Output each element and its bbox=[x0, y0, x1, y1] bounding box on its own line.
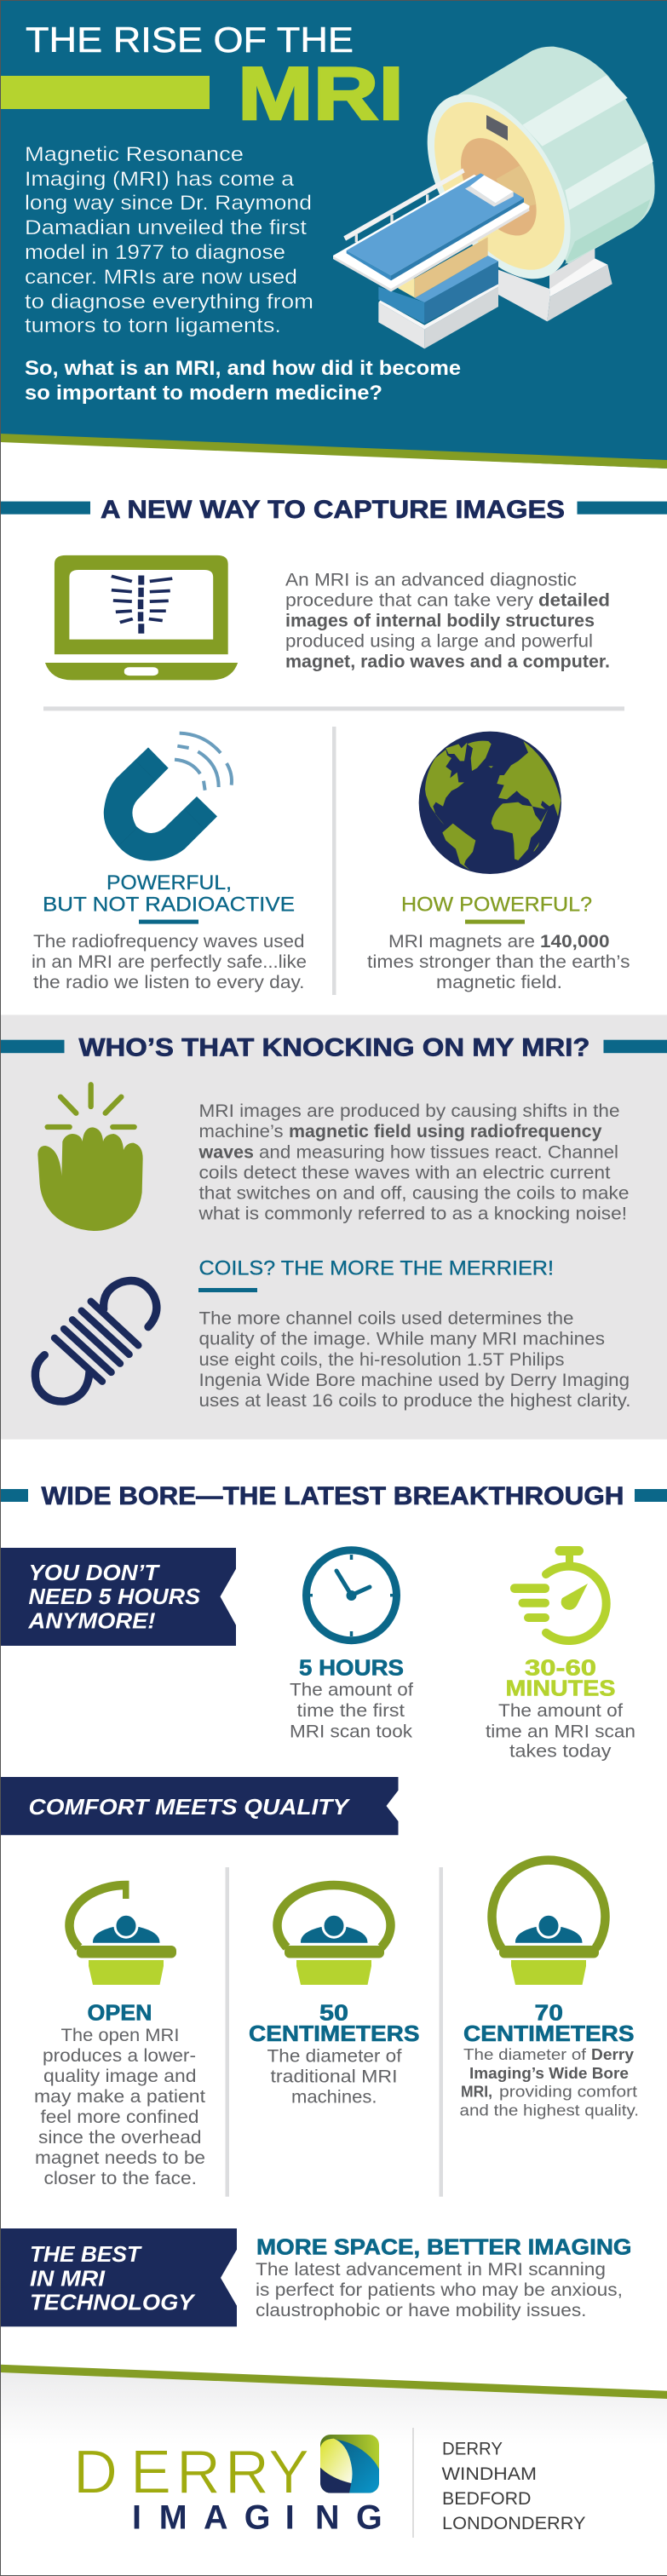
column: powerful but not radioactive: POWERFUL, bbox=[106, 871, 232, 894]
column: how powerful: times stronger than the earth’s bbox=[367, 952, 630, 972]
knocking text: magnetic field using radiofrequency bbox=[289, 1122, 602, 1141]
column: open: closer to the face. bbox=[44, 2169, 197, 2188]
column: 50 centimeters: machines. bbox=[291, 2088, 377, 2107]
logo wordmark IMAGING: IMAGING bbox=[132, 2498, 382, 2536]
column: open: feel more confined bbox=[41, 2107, 199, 2127]
stat: 5 hours: MRI scan took bbox=[290, 1722, 413, 1741]
column: how powerful bbox=[367, 893, 630, 992]
column: how powerful: MRI magnets are bbox=[388, 932, 535, 952]
column: powerful but not radioactive: in an MRI are perfectly safe...like bbox=[32, 952, 307, 972]
panel: a new way to capture images bbox=[0, 496, 667, 995]
intro paragraph: to diagnose everything from bbox=[25, 290, 313, 313]
description text: images of internal bodily structures bbox=[285, 612, 595, 630]
description text: detailed bbox=[538, 590, 610, 610]
column: powerful but not radioactive: the radio we listen to every day. bbox=[33, 973, 305, 992]
stat: 30-60 minutes: time an MRI scan bbox=[486, 1722, 635, 1741]
column: open: The open MRI bbox=[61, 2026, 179, 2045]
locations list: LONDONDERRY bbox=[442, 2514, 586, 2533]
ribbon: you don't need 5 hours: ANYMORE! bbox=[27, 1607, 156, 1633]
title MRI: MRI bbox=[238, 51, 404, 135]
stat: 30-60 minutes: 30-60 bbox=[525, 1655, 596, 1681]
ribbon: you don't need 5 hours: YOU DON’T bbox=[29, 1560, 160, 1585]
knocking text: waves bbox=[198, 1142, 254, 1162]
green slanted band bbox=[0, 2365, 667, 2399]
more space, better imaging: claustrophobic or have mobility issues. bbox=[256, 2301, 586, 2320]
stat: 30-60 minutes bbox=[486, 1655, 635, 1762]
column: 50 centimeters: 50 bbox=[319, 2000, 348, 2026]
more space, better imaging bbox=[256, 2234, 632, 2320]
title accent bar bbox=[0, 76, 210, 109]
stat: 5 hours: The amount of bbox=[290, 1681, 413, 1700]
column: how powerful: 140,000 bbox=[540, 932, 610, 952]
column: 50 centimeters: CENTIMETERS bbox=[249, 2021, 419, 2046]
knocking text: MRI images are produced by causing shifts in the bbox=[199, 1101, 620, 1121]
column: 70 centimeters: The diameter of bbox=[463, 2046, 587, 2063]
icon: laptop with x-ray bbox=[45, 555, 238, 680]
column: 70 centimeters: Derry bbox=[591, 2046, 634, 2063]
column: open: produces a lower- bbox=[43, 2046, 196, 2066]
intro paragraph bbox=[25, 143, 313, 337]
description text: procedure that can take very bbox=[285, 590, 534, 610]
coils text: quality of the image. While many MRI machines bbox=[199, 1330, 605, 1349]
icon: magnet with waves bbox=[104, 733, 232, 861]
panel: footer bbox=[0, 2365, 667, 2538]
icon: traditional MRI bbox=[278, 1885, 390, 1985]
column: how powerful: HOW POWERFUL? bbox=[401, 893, 592, 916]
column: 70 centimeters: MRI, bbox=[461, 2083, 492, 2100]
column: open: may make a patient bbox=[34, 2087, 205, 2107]
logo wordmark DERRY: DERRY bbox=[73, 2439, 309, 2507]
coils text: Ingenia Wide Bore machine used by Derry Imaging bbox=[199, 1371, 630, 1390]
ribbon: you don't need 5 hours: NEED 5 HOURS bbox=[29, 1584, 201, 1609]
coils text: The more channel coils used determines the bbox=[199, 1308, 574, 1329]
coils subheading bbox=[198, 1257, 554, 1292]
description text bbox=[285, 570, 610, 672]
panel: who's that knocking bbox=[0, 1015, 667, 1440]
locations list: WINDHAM bbox=[441, 2464, 537, 2484]
icon: globe bbox=[419, 732, 561, 874]
intro paragraph: Magnetic Resonance bbox=[25, 143, 244, 166]
locations list: DERRY bbox=[442, 2440, 503, 2459]
title line: THE RISE OF THE bbox=[26, 20, 354, 60]
column: 70 centimeters: and the highest quality. bbox=[460, 2102, 639, 2119]
ribbon: you don't need 5 hours bbox=[0, 1548, 236, 1646]
description text: produced using a large and powerful bbox=[285, 632, 593, 652]
icon: wide bore MRI bbox=[492, 1860, 605, 1985]
column: powerful but not radioactive: The radiofrequency waves used bbox=[33, 932, 305, 952]
icon: stopwatch bbox=[510, 1546, 607, 1641]
section heading: A NEW WAY TO CAPTURE IMAGES bbox=[101, 496, 565, 524]
icon: open MRI bbox=[69, 1881, 176, 1985]
ribbon: comfort meets quality: COMFORT MEETS QUALITY bbox=[29, 1794, 351, 1820]
knocking text: machine’s bbox=[199, 1122, 283, 1141]
stat: 5 hours: time the first bbox=[296, 1701, 405, 1721]
description text: magnet, radio waves and a computer. bbox=[285, 653, 610, 672]
section heading bbox=[0, 496, 667, 524]
icon: clock bbox=[307, 1550, 397, 1641]
intro question: So, what is an MRI, and how did it become bbox=[25, 357, 461, 380]
knocking text: that switches on and off, causing the coils to make bbox=[199, 1184, 629, 1204]
stat: 5 hours: 5 HOURS bbox=[299, 1655, 404, 1681]
more space, better imaging: The latest advancement in MRI scanning bbox=[256, 2260, 606, 2280]
column: open: quality image and bbox=[43, 2067, 197, 2086]
intro question: so important to modern medicine? bbox=[25, 382, 382, 405]
ribbon: the best in MRI technology bbox=[0, 2228, 237, 2326]
column: open: since the overhead bbox=[38, 2128, 201, 2148]
locations list bbox=[441, 2440, 586, 2533]
section heading: WIDE BORE—THE LATEST BREAKTHROUGH bbox=[41, 1482, 624, 1510]
icon: knocking hand bbox=[37, 1084, 143, 1231]
intro paragraph: tumors to torn ligaments. bbox=[25, 314, 281, 337]
column: 70 centimeters: providing comfort bbox=[499, 2083, 637, 2100]
column: powerful but not radioactive: BUT NOT RADIOACTIVE bbox=[43, 893, 295, 916]
column: 50 centimeters bbox=[249, 2000, 419, 2107]
column: open bbox=[34, 2000, 205, 2188]
stat: 30-60 minutes: The amount of bbox=[498, 1701, 623, 1721]
intro paragraph: Damadian unveiled the first bbox=[25, 216, 307, 239]
column: 50 centimeters: traditional MRI bbox=[271, 2067, 397, 2087]
ribbon: the best in MRI technology: THE BEST bbox=[30, 2241, 142, 2267]
stat: 30-60 minutes: takes today bbox=[509, 1742, 612, 1762]
column: 70 centimeters: 70 bbox=[535, 2000, 563, 2026]
knocking text: coils detect these waves with an electric current bbox=[199, 1163, 611, 1182]
ribbon: comfort meets quality bbox=[0, 1777, 399, 1835]
section heading: WHO’S THAT KNOCKING ON MY MRI? bbox=[78, 1033, 589, 1061]
intro paragraph: cancer. MRIs are now used bbox=[25, 266, 297, 289]
coils text: uses at least 16 coils to produce the highest clarity. bbox=[199, 1391, 630, 1411]
stat: 5 hours bbox=[290, 1655, 413, 1741]
more space, better imaging: is perfect for patients who may be anxious, bbox=[256, 2280, 623, 2300]
panel: hero header bbox=[0, 0, 667, 469]
knocking text: what is commonly referred to as a knocking noise! bbox=[198, 1205, 627, 1224]
coils text bbox=[199, 1308, 630, 1411]
intro question bbox=[25, 357, 461, 405]
knocking text bbox=[198, 1101, 629, 1224]
ribbon: the best in MRI technology: IN MRI bbox=[30, 2265, 106, 2291]
green slanted band bbox=[0, 434, 667, 469]
coils text: use eight coils, the hi-resolution 1.5T Philips bbox=[199, 1350, 564, 1370]
ribbon: the best in MRI technology: TECHNOLOGY bbox=[30, 2289, 196, 2314]
panel: wide bore bbox=[0, 1482, 667, 2326]
knocking text: and measuring how tissues react. Channel bbox=[259, 1142, 618, 1162]
column: 50 centimeters: The diameter of bbox=[267, 2047, 402, 2067]
column: 70 centimeters: Imaging’s Wide Bore bbox=[469, 2065, 629, 2082]
intro paragraph: long way since Dr. Raymond bbox=[25, 192, 312, 215]
intro paragraph: model in 1977 to diagnose bbox=[25, 241, 285, 264]
logo icon bbox=[320, 2435, 379, 2493]
column: 70 centimeters: CENTIMETERS bbox=[463, 2021, 634, 2046]
column: open: OPEN bbox=[87, 2000, 152, 2026]
locations list: BEDFORD bbox=[442, 2489, 532, 2509]
column: open: magnet needs to be bbox=[35, 2148, 205, 2168]
stat: 30-60 minutes: MINUTES bbox=[506, 1676, 615, 1701]
more space, better imaging: MORE SPACE, BETTER IMAGING bbox=[256, 2234, 632, 2260]
intro paragraph: Imaging (MRI) has come a bbox=[25, 168, 295, 191]
section heading bbox=[0, 1033, 667, 1061]
icon: MRI machine bbox=[333, 47, 655, 348]
description text: An MRI is an advanced diagnostic bbox=[285, 570, 577, 589]
column: powerful but not radioactive bbox=[32, 871, 307, 992]
column: 70 centimeters bbox=[460, 2000, 639, 2119]
column: how powerful: magnetic field. bbox=[436, 973, 562, 992]
coils subheading: COILS? THE MORE THE MERRIER! bbox=[199, 1257, 554, 1279]
icon: coil bbox=[35, 1280, 157, 1401]
